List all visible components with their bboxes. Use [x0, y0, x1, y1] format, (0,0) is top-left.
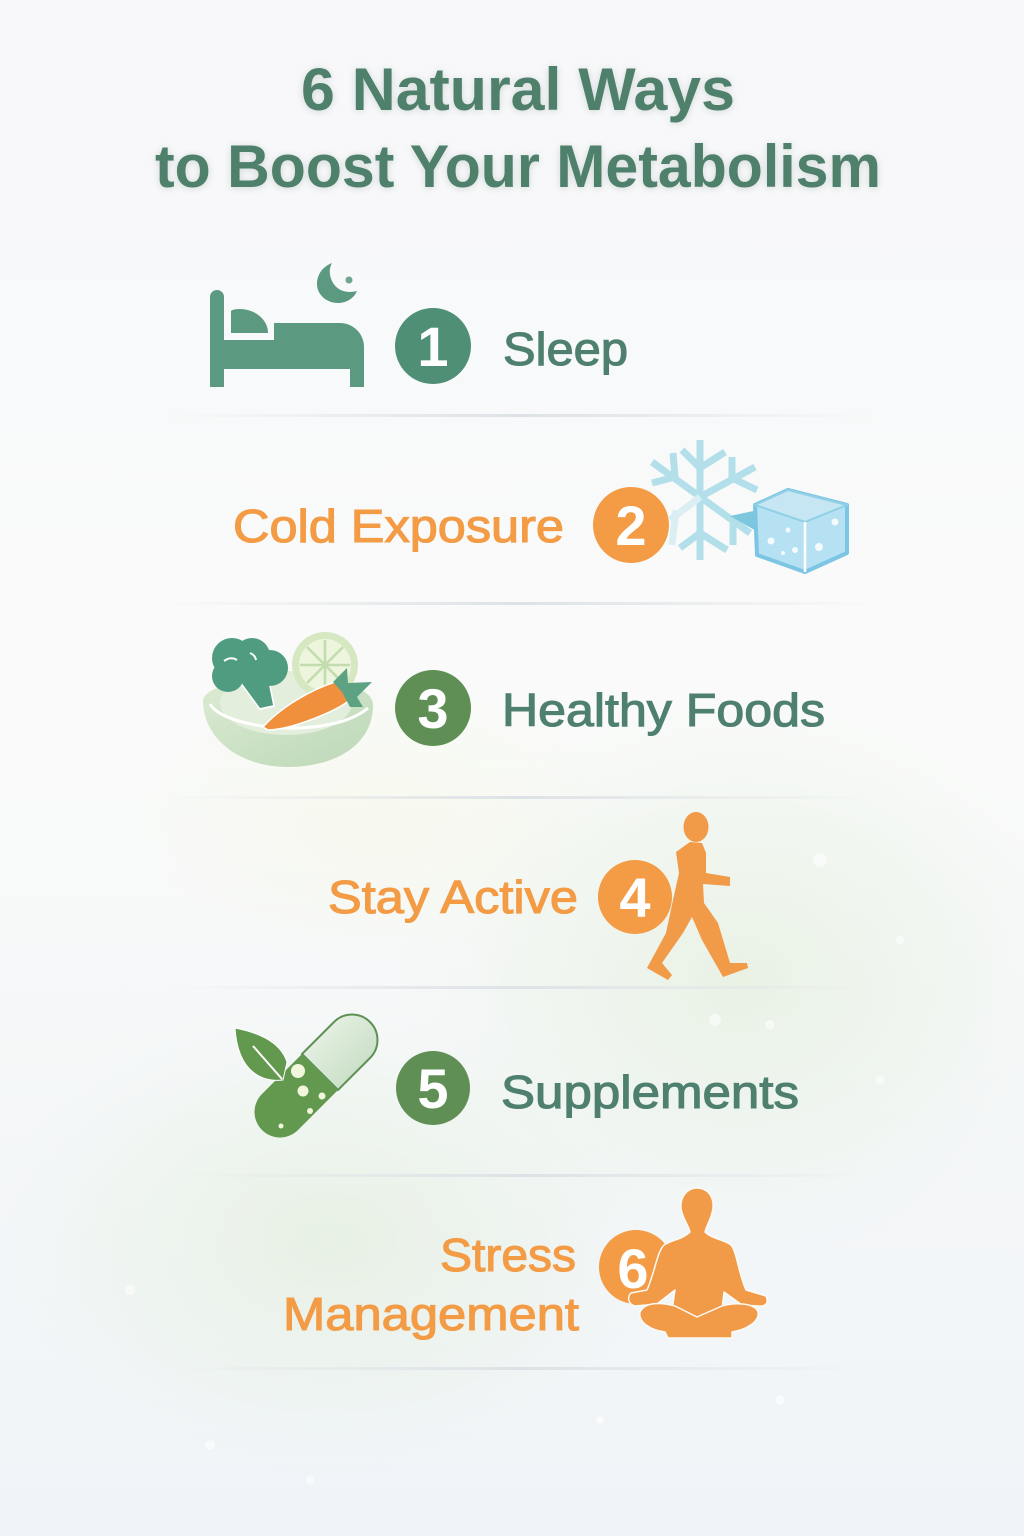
number badge 3 — [395, 670, 471, 746]
icon: walking person — [647, 812, 748, 980]
label: Sleep: Sleep — [503, 323, 628, 375]
row 6: stress management — [283, 1188, 767, 1340]
label: Cold Exposure: Cold Exposure — [233, 500, 564, 552]
number badge 4 — [598, 860, 672, 934]
label: Stress Management: Management — [283, 1288, 579, 1340]
title: to Boost Your Metabolism — [155, 133, 881, 200]
row 1: sleep — [210, 263, 628, 387]
row 5: supplements — [235, 1015, 799, 1137]
number badge 5: 5 — [417, 1057, 449, 1120]
number badge 4: 4 — [619, 866, 651, 929]
label: Healthy Foods: Healthy Foods — [502, 684, 825, 736]
icon: bowl of vegetables — [203, 632, 373, 767]
number badge 3: 3 — [417, 677, 449, 740]
number badge 2 — [593, 487, 669, 563]
icon: meditating person — [629, 1188, 767, 1338]
icon: capsule with leaf — [235, 1015, 377, 1137]
title — [155, 56, 881, 200]
label: Stress Management — [283, 1229, 579, 1340]
label: Supplements: Supplements — [501, 1066, 799, 1118]
icon: snowflake — [652, 440, 757, 560]
dividers — [165, 414, 875, 1370]
row 2: cold exposure — [233, 440, 847, 572]
label: Stay Active: Stay Active — [328, 871, 578, 923]
row 3: healthy foods — [203, 632, 825, 767]
number badge 6 — [599, 1230, 673, 1304]
number badge 1: 1 — [417, 315, 449, 378]
number badge 6: 6 — [617, 1237, 649, 1300]
row 4: stay active — [328, 812, 748, 980]
icon: bed with moon — [210, 263, 364, 387]
number badge 5 — [396, 1051, 470, 1125]
number badge 2: 2 — [615, 494, 647, 557]
title: 6 Natural Ways — [301, 56, 735, 123]
number badge 1 — [395, 308, 471, 384]
icon: ice cube — [730, 490, 847, 572]
label: Stress Management: Stress — [440, 1229, 576, 1281]
